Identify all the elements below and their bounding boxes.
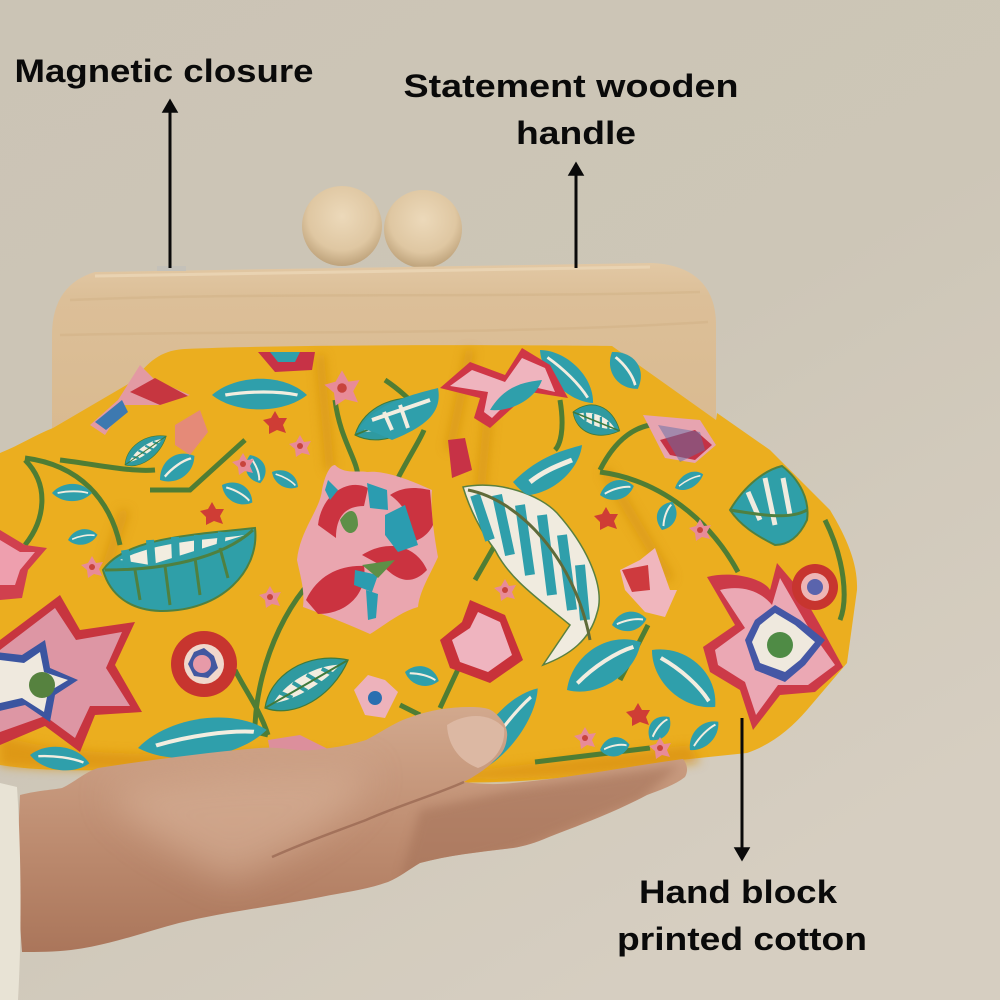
hand holding bag: [18, 707, 687, 952]
finger shadow: [400, 765, 680, 880]
arrow: to closure: [163, 100, 177, 268]
floral print: round flowers: [171, 564, 838, 697]
floral print: medium flowers: [0, 348, 716, 752]
clutch bag body: [0, 340, 857, 784]
floral print: central flower: [297, 465, 438, 634]
icon: metal hinge: [157, 266, 186, 271]
thumb crease: [272, 782, 464, 857]
label: wooden handle: handle: [516, 115, 636, 151]
label: cotton: Hand block: [639, 874, 837, 910]
wooden handle frame: [52, 263, 716, 432]
arrow: to fabric: [735, 718, 749, 860]
floral print: leaf right: [730, 466, 808, 545]
floral print: big striped leaf centre: [463, 445, 599, 665]
label: wooden handle: [404, 68, 738, 268]
floral print: large star flower left: [0, 595, 142, 752]
floral print: large star flower right: [703, 563, 843, 730]
stems: [25, 380, 844, 762]
floral print: big striped leaf left: [103, 528, 255, 611]
handle grain detail: [60, 292, 708, 335]
floral print: other leaves: [28, 340, 729, 784]
yellow printed fabric: [0, 345, 857, 783]
label: cotton: [617, 718, 867, 957]
label: magnetic closure: Magnetic closure: [14, 53, 314, 89]
icon: wooden ball clasp: [302, 186, 462, 268]
thumb nail: [447, 716, 504, 768]
label: magnetic closure: [14, 53, 314, 268]
fabric shading: [0, 350, 700, 779]
label: wooden handle: Statement wooden: [404, 68, 738, 104]
handle top edge highlight: [95, 267, 650, 276]
label: cotton: printed cotton: [617, 921, 867, 957]
floral print: small blossoms: [81, 370, 711, 759]
sleeve cuff: [0, 783, 21, 1000]
hand light patch: [124, 772, 355, 882]
arrow: to handle: [569, 163, 583, 268]
